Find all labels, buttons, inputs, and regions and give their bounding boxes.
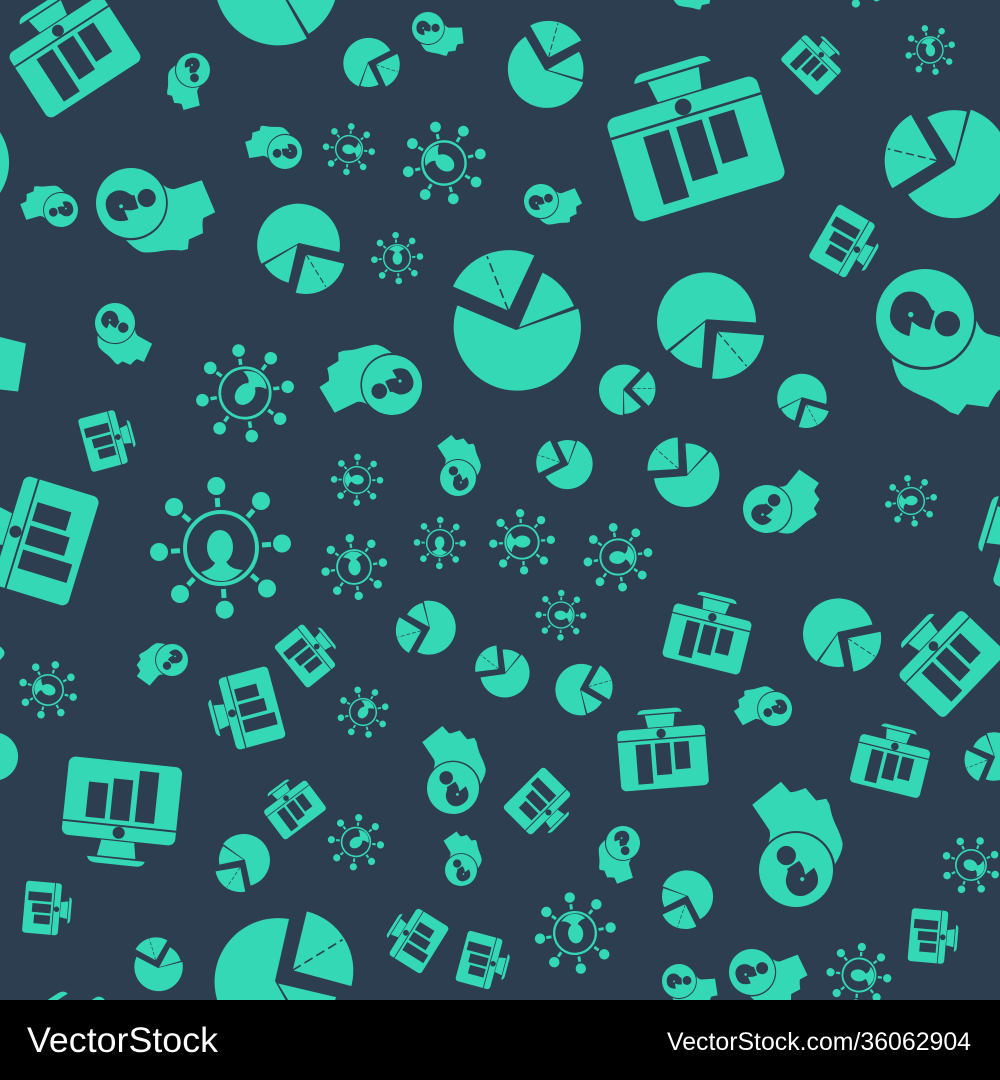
icon: head with question mark xyxy=(658,0,723,18)
icon: monitor xyxy=(22,881,73,936)
icon: user network xyxy=(931,826,1000,905)
icon: head with question mark xyxy=(735,454,831,551)
icon: pie chart xyxy=(468,634,539,707)
icon: head with question mark xyxy=(517,167,589,238)
footer bar xyxy=(0,1000,1000,1080)
icon: pie chart xyxy=(0,732,18,781)
icon: head with question mark xyxy=(876,269,1000,415)
icon: user network xyxy=(371,232,423,284)
icon: user network xyxy=(0,826,10,905)
icon: pie chart xyxy=(394,597,458,658)
icon: monitor xyxy=(0,974,143,1080)
icon: monitor xyxy=(615,705,709,792)
icon: head with question mark xyxy=(585,820,655,890)
icon: user network xyxy=(319,119,379,179)
icon: pie chart xyxy=(639,424,731,519)
icon: pie chart xyxy=(251,197,348,302)
icon: pie chart xyxy=(965,732,1000,781)
icon: monitor xyxy=(274,616,345,689)
icon: head with question mark xyxy=(426,824,495,893)
icon: pie chart xyxy=(204,905,365,1055)
icon: monitor xyxy=(780,26,850,96)
icon: pie chart xyxy=(644,259,773,394)
icon: monitor xyxy=(78,406,140,472)
icon: monitor xyxy=(0,468,100,607)
icon: head with question mark xyxy=(658,954,723,1018)
icon: pie chart xyxy=(553,661,615,719)
icon: user network xyxy=(821,0,897,13)
icon: pie chart xyxy=(866,79,1000,240)
icon: head with question mark xyxy=(396,714,507,825)
icon: user network xyxy=(10,652,86,728)
icon: pie chart xyxy=(528,425,603,500)
icon: monitor xyxy=(202,666,286,754)
icon: pie chart xyxy=(774,371,830,431)
icon: pie chart xyxy=(0,79,31,240)
image url: VectorStock.com/36062904 xyxy=(667,1029,971,1056)
icon: monitor xyxy=(907,908,960,965)
icon: pie chart xyxy=(453,250,581,391)
icon: user network xyxy=(901,20,960,80)
icon: head with question mark xyxy=(726,672,799,745)
icon: head with question mark xyxy=(720,926,817,1022)
icon: user network xyxy=(176,324,315,463)
icon: user network xyxy=(327,676,400,749)
icon: pie chart xyxy=(132,936,185,993)
icon: monitor xyxy=(59,756,183,870)
icon: pie chart xyxy=(592,357,662,424)
icon: monitor xyxy=(378,901,450,974)
icon: user network xyxy=(531,889,620,978)
icon: user network xyxy=(385,104,503,222)
icon: head with question mark xyxy=(239,114,307,182)
icon: monitor xyxy=(849,718,935,799)
icon: monitor xyxy=(662,586,757,675)
icon: user network xyxy=(883,473,939,529)
brand name: VectorStock xyxy=(27,1020,218,1060)
icon: head with question mark xyxy=(14,172,84,242)
icon: monitor xyxy=(883,595,1000,719)
icon: monitor xyxy=(968,468,1000,607)
icon: monitor xyxy=(455,930,514,993)
icon: monitor xyxy=(595,42,787,224)
icon: monitor xyxy=(256,770,327,841)
icon: pie chart xyxy=(203,824,280,900)
icon: head with question mark xyxy=(408,4,468,63)
icon: pie chart xyxy=(646,860,724,938)
icon: monitor xyxy=(808,203,888,285)
icon: head with question mark xyxy=(129,631,194,697)
icon: user network xyxy=(580,520,656,595)
icon: head with question mark xyxy=(419,427,495,503)
icon: pie chart xyxy=(789,584,892,689)
icon: user network xyxy=(533,588,589,643)
icon: head with question mark xyxy=(155,47,223,116)
icon: head with question mark xyxy=(306,320,434,448)
icon: head with question mark xyxy=(715,765,873,922)
icon: head with question mark xyxy=(85,299,160,372)
icon: user network xyxy=(821,938,897,1013)
icon: pie chart xyxy=(204,0,365,55)
icon: user network xyxy=(412,515,468,571)
icon: user network xyxy=(318,531,390,603)
icon: user network xyxy=(489,509,555,575)
icon: monitor xyxy=(0,595,7,719)
icon: head with question mark xyxy=(83,135,229,280)
icon: head with question mark xyxy=(0,269,26,415)
icon: monitor xyxy=(502,766,580,844)
icon: user network xyxy=(329,452,385,508)
icon: user network xyxy=(317,803,395,882)
icon: user network xyxy=(150,477,291,619)
icon: pie chart xyxy=(492,8,606,123)
icon: monitor xyxy=(0,0,143,120)
icon: pie chart xyxy=(333,27,408,102)
